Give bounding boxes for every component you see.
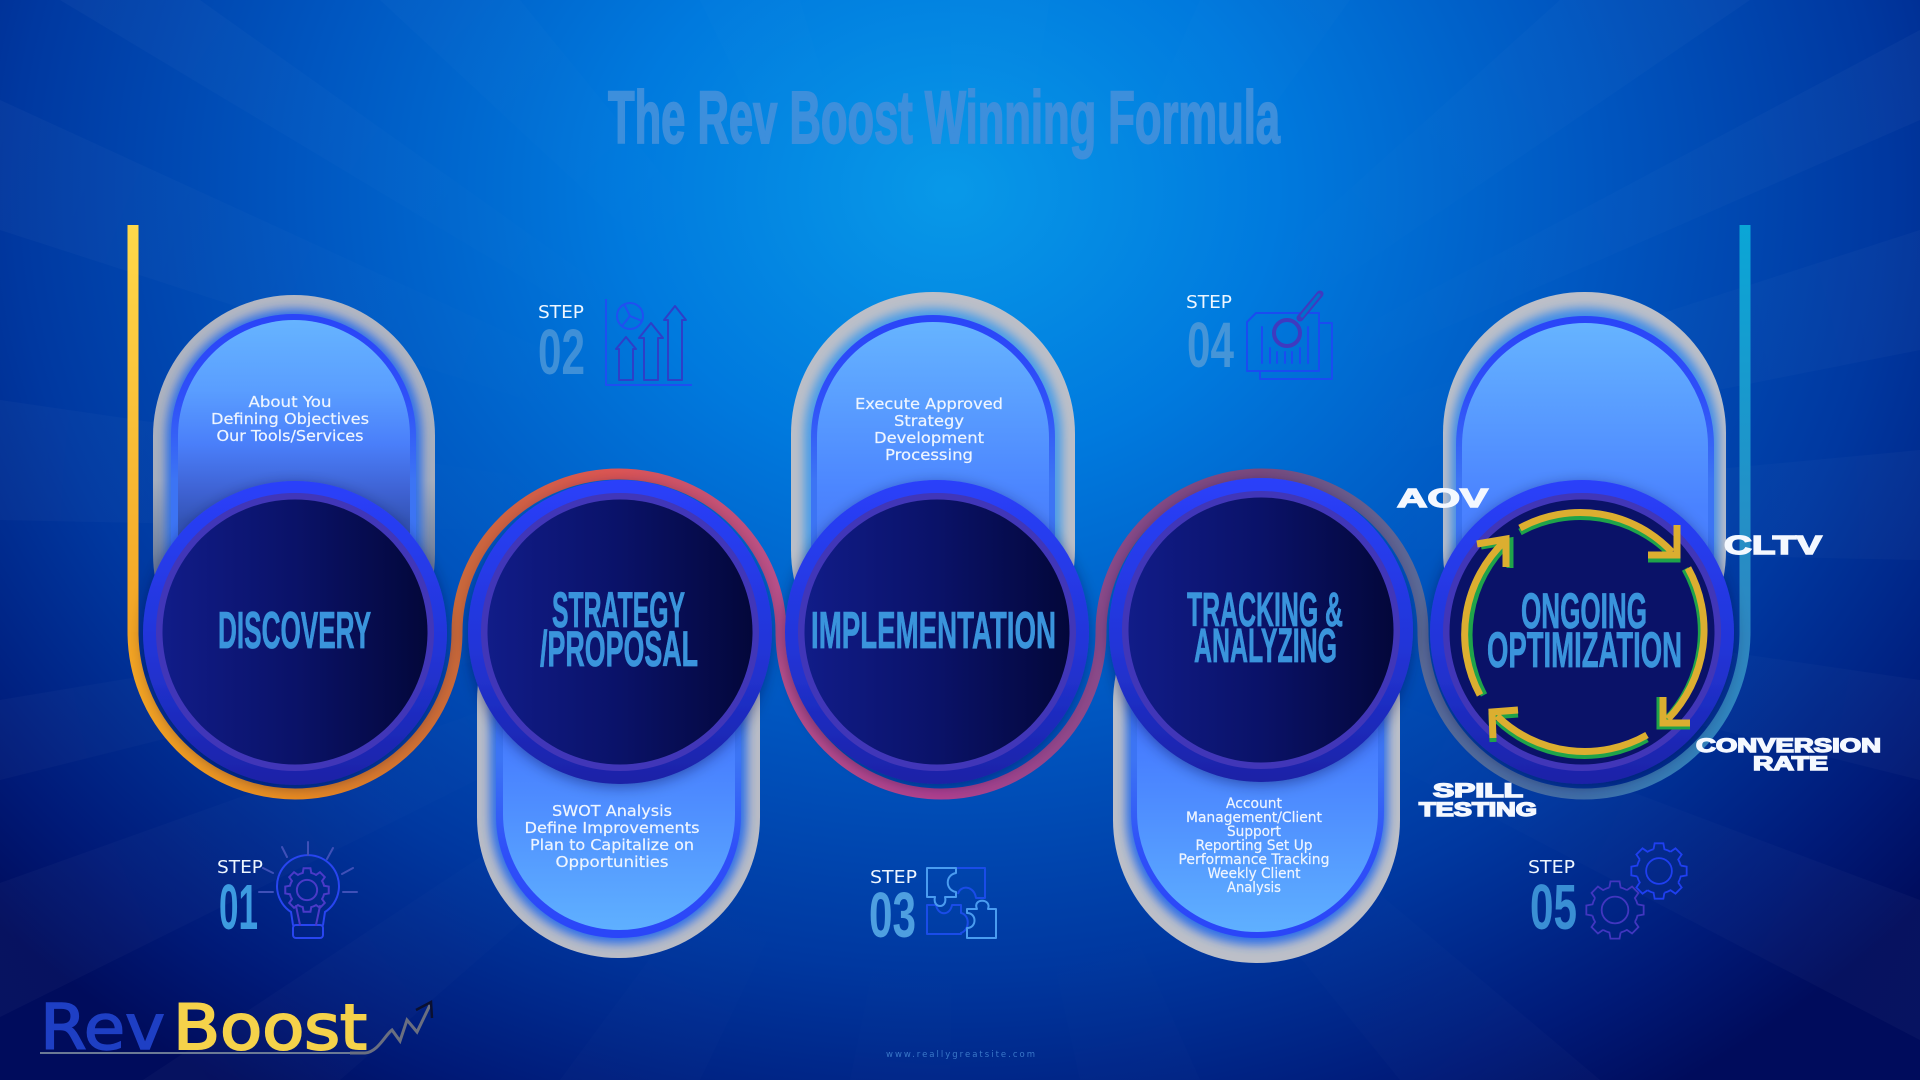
label: CLTV: CLTV <box>1724 530 1823 560</box>
panel: strategy pill <box>477 560 760 958</box>
text: strategy details: Opportunities <box>556 853 669 871</box>
step 05 label <box>1528 857 1577 943</box>
text: strategy details <box>524 802 700 871</box>
logo: RevBoost: Rev <box>40 991 165 1064</box>
icon: growth line <box>40 1002 432 1053</box>
step 4 circle: tracking and analyzing: ANALYZING <box>1194 620 1337 673</box>
step 4 circle: tracking and analyzing <box>1109 478 1413 782</box>
icon: light bulb with gear <box>259 842 357 938</box>
step 01 label <box>217 857 263 943</box>
step 3 circle: implementation: IMPLEMENTATION <box>811 602 1056 660</box>
text: tracking details: Support <box>1227 824 1281 840</box>
step 1 circle: discovery <box>143 481 447 785</box>
icon: report with magnifier <box>1247 294 1332 379</box>
step 5 circle: ongoing optimization: OPTIMIZATION <box>1487 622 1682 678</box>
text: tracking details: Analysis <box>1227 880 1281 896</box>
step 04 label: 04 <box>1187 309 1234 381</box>
label: spill testing: SPILL <box>1433 781 1524 802</box>
label: conversion rate <box>1696 736 1881 775</box>
text: implementation details: Execute Approved <box>855 395 1003 413</box>
text: implementation details: Development <box>874 429 984 447</box>
step 5 circle: ongoing optimization <box>1430 480 1734 784</box>
step 2 circle: strategy / proposal <box>468 480 772 784</box>
label: conversion rate: CONVERSION <box>1696 736 1881 757</box>
label: conversion rate: RATE <box>1753 754 1828 775</box>
step 02 label: STEP <box>538 302 584 323</box>
text: strategy details: Define Improvements <box>524 819 700 837</box>
logo: RevBoost <box>40 991 432 1064</box>
step 01 label: 01 <box>219 871 258 943</box>
text: tracking details: Account <box>1226 796 1283 812</box>
step 01 label: STEP <box>217 857 263 878</box>
text: discovery details: Our Tools/Services <box>216 427 364 445</box>
panel: implementation pill <box>791 292 1075 695</box>
panel: tracking pill <box>1113 560 1400 963</box>
step 02 label: 02 <box>538 316 585 388</box>
step 04 label: STEP <box>1186 292 1232 313</box>
footer website: www.reallygreatsite.com <box>886 1050 1035 1060</box>
text: tracking details: Performance Tracking <box>1178 852 1330 868</box>
text: implementation details: Processing <box>885 446 973 464</box>
text: discovery details: About You <box>248 393 332 411</box>
icon: two gears <box>1586 843 1687 939</box>
label: AOV: AOV <box>1397 483 1489 513</box>
text: tracking details: Reporting Set Up <box>1196 838 1313 854</box>
text: strategy details: SWOT Analysis <box>552 802 672 820</box>
panel: discovery pill <box>153 295 435 695</box>
step 3 circle: implementation <box>785 480 1089 784</box>
text: implementation details <box>855 395 1003 464</box>
icon: puzzle pieces <box>927 868 996 938</box>
label: spill testing <box>1419 781 1537 821</box>
icon: bar chart arrows <box>606 299 692 385</box>
step 02 label <box>538 302 585 388</box>
step 04 label <box>1186 292 1234 381</box>
step 03 label <box>869 867 917 951</box>
step 05 label: STEP <box>1528 857 1575 878</box>
text: implementation details: Strategy <box>894 412 964 430</box>
logo: RevBoost: Boost <box>173 991 367 1064</box>
panel: ongoing optimization pill <box>1443 292 1726 696</box>
icon: cycle arrows <box>1465 513 1704 755</box>
step 03 label: 03 <box>869 879 916 951</box>
text: tracking details: Weekly Client <box>1208 866 1301 882</box>
step 4 circle: tracking and analyzing: TRACKING & <box>1187 584 1343 637</box>
label: spill testing: TESTING <box>1419 800 1537 821</box>
text: strategy details: Plan to Capitalize on <box>530 836 694 854</box>
text: discovery details <box>211 393 369 445</box>
step 03 label: STEP <box>870 867 917 888</box>
step 2 circle: strategy / proposal: /PROPOSAL <box>540 621 698 677</box>
step 1 circle: discovery: DISCOVERY <box>218 602 371 660</box>
text: tracking details <box>1178 796 1330 896</box>
step 2 circle: strategy / proposal: STRATEGY <box>552 582 685 638</box>
title: The Rev Boost Winning Formula <box>608 76 1280 159</box>
connecting wave line <box>133 225 1745 794</box>
text: tracking details: Management/Client <box>1186 810 1322 826</box>
step 05 label: 05 <box>1530 871 1577 943</box>
text: discovery details: Defining Objectives <box>211 410 369 428</box>
step 5 circle: ongoing optimization: ONGOING <box>1521 583 1647 639</box>
